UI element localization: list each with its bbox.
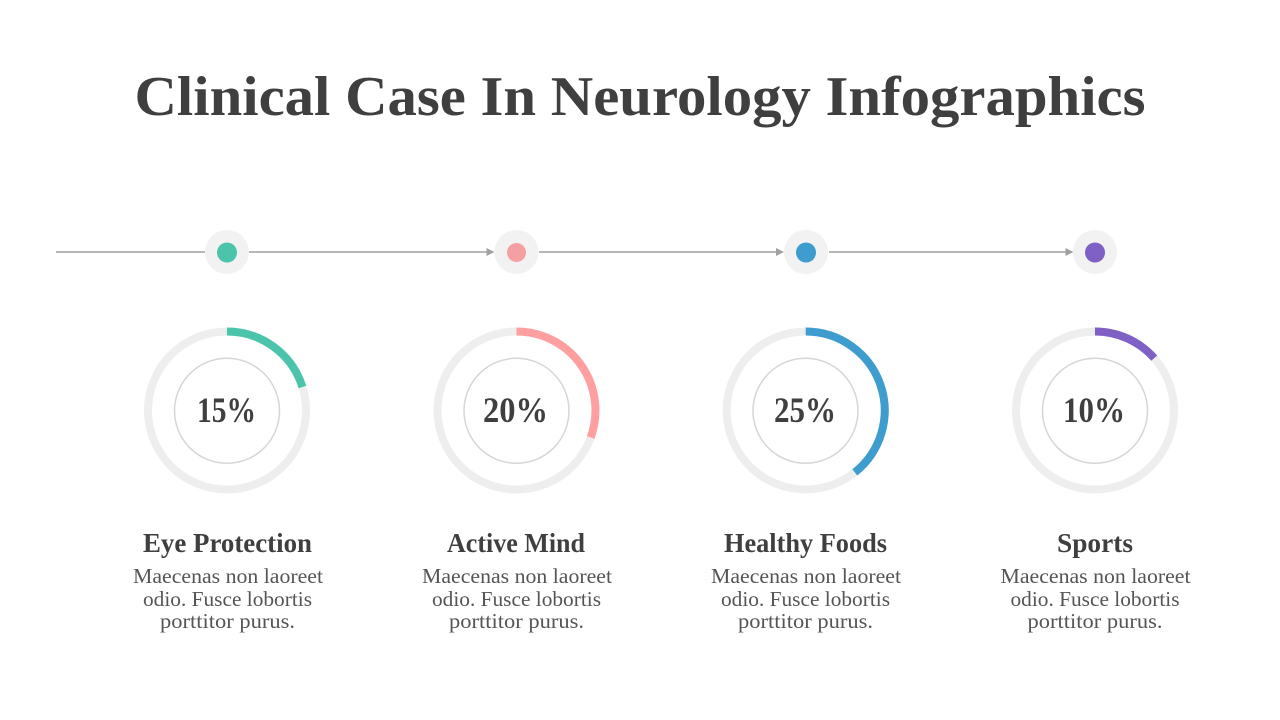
description: odio. Fusce lobortis — [721, 587, 890, 611]
description: odio. Fusce lobortis — [1010, 587, 1180, 611]
panel: sports — [1000, 331, 1191, 633]
description: Maecenas non laoreet — [422, 564, 612, 588]
description: Maecenas non laoreet — [711, 564, 901, 588]
donut chart: 25%: 25% — [774, 390, 836, 430]
heading: Eye Protection — [143, 528, 312, 558]
arrow: to step 2 — [249, 248, 494, 256]
description — [133, 564, 323, 633]
description — [422, 564, 612, 633]
donut chart: 15% — [148, 332, 306, 490]
panel: eye protection — [133, 332, 323, 633]
node: blue — [784, 230, 828, 274]
title: Clinical Case In Neurology Infographics — [134, 66, 1146, 128]
donut chart: 20% — [438, 332, 596, 490]
description: odio. Fusce lobortis — [432, 587, 601, 611]
donut chart: 15%: 15% — [197, 390, 256, 430]
heading: Healthy Foods — [724, 528, 887, 558]
description: Maecenas non laoreet — [1000, 564, 1191, 588]
donut chart: 25% — [727, 332, 885, 490]
node: pink — [494, 230, 538, 274]
arrow: to step 3 — [539, 248, 784, 256]
node: teal — [205, 230, 249, 274]
heading: Sports — [1057, 528, 1133, 558]
timeline — [56, 230, 1117, 274]
heading: Active Mind — [447, 528, 585, 558]
donut chart: 20%: 20% — [483, 390, 548, 430]
donut chart: 10%: 10% — [1063, 390, 1125, 430]
panel: active mind — [422, 332, 612, 633]
description: odio. Fusce lobortis — [143, 587, 312, 611]
timeline start line — [56, 251, 205, 253]
description: porttitor purus. — [160, 609, 295, 633]
arrow: to step 4 — [829, 248, 1074, 256]
description: porttitor purus. — [449, 609, 584, 633]
description: porttitor purus. — [1028, 609, 1162, 633]
description: porttitor purus. — [738, 609, 873, 633]
description — [1000, 564, 1191, 633]
node: purple — [1073, 230, 1117, 274]
panel: healthy foods — [711, 332, 901, 633]
description: Maecenas non laoreet — [133, 564, 323, 588]
donut chart: 10% — [1016, 331, 1174, 490]
description — [711, 564, 901, 633]
